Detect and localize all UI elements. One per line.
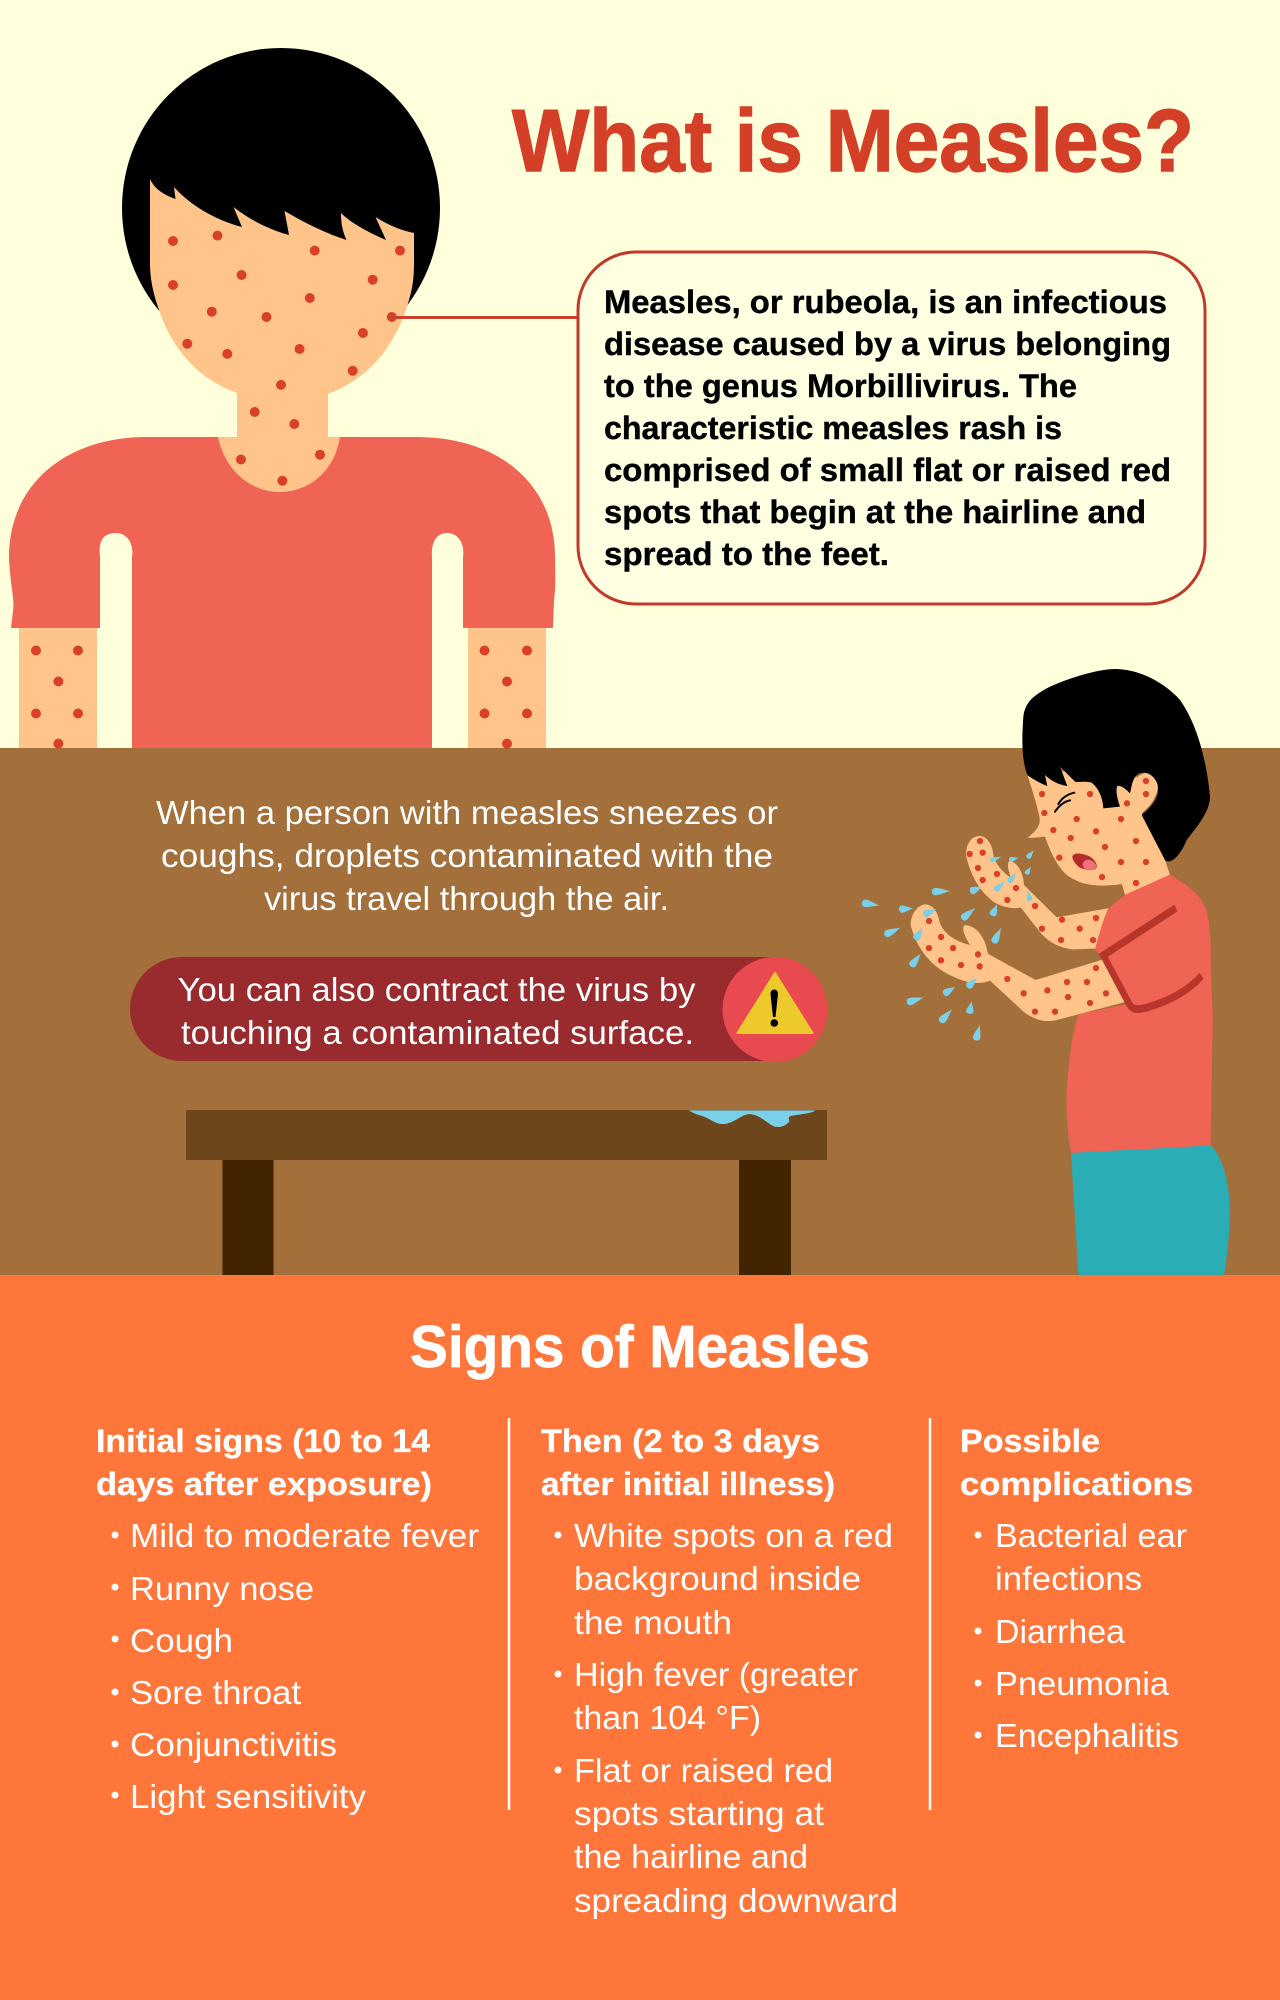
child head details bbox=[1022, 669, 1210, 886]
illustration: man with measles rash bbox=[9, 48, 555, 749]
initial signs heading: Initial signs (10 to 14 bbox=[96, 1423, 430, 1459]
child ear bbox=[1127, 773, 1158, 813]
column: then bbox=[541, 1423, 898, 1919]
callout text bbox=[604, 284, 1171, 572]
then list: spreading downward bbox=[574, 1882, 898, 1919]
child sleeve outline bbox=[1103, 908, 1202, 1009]
then list: High fever (greater bbox=[574, 1656, 858, 1693]
rash spots on child arms bbox=[926, 838, 1109, 1015]
table top bbox=[186, 1110, 827, 1160]
droplet spill bbox=[689, 1110, 815, 1127]
then list bbox=[554, 1517, 898, 1919]
then heading: after initial illness) bbox=[541, 1466, 835, 1502]
initial signs list: Runny nose bbox=[130, 1570, 314, 1607]
then list: the mouth bbox=[574, 1604, 732, 1641]
man hair bbox=[122, 48, 440, 368]
complications heading: complications bbox=[960, 1466, 1193, 1502]
child lower arm and hand bbox=[911, 904, 1127, 1021]
then list: Flat or raised red bbox=[574, 1752, 833, 1789]
child open mouth bbox=[1072, 854, 1097, 870]
child closed eye bbox=[1055, 793, 1074, 812]
man face bbox=[150, 179, 414, 394]
column dividers bbox=[509, 1418, 930, 1810]
then list: spots starting at bbox=[574, 1795, 824, 1832]
illustration: sneezing child bbox=[861, 669, 1230, 1275]
pill text bbox=[178, 971, 696, 1051]
title: What is Measles? bbox=[512, 91, 1194, 190]
complications list: Pneumonia bbox=[995, 1665, 1170, 1702]
column: possible complications bbox=[960, 1423, 1193, 1754]
initial signs list: Cough bbox=[130, 1622, 233, 1659]
then list: than 104 °F) bbox=[574, 1699, 761, 1736]
complications list bbox=[974, 1517, 1187, 1754]
child hair bbox=[1022, 669, 1210, 861]
column: initial signs bbox=[96, 1423, 479, 1815]
initial signs list: Mild to moderate fever bbox=[130, 1517, 479, 1554]
callout text: disease caused by a virus belonging bbox=[604, 326, 1171, 362]
text: how droplets spread: When a person with measles sneezes or bbox=[156, 794, 778, 831]
text: how droplets spread: coughs, droplets contaminated with the bbox=[161, 837, 773, 874]
callout text: to the genus Morbillivirus. The bbox=[604, 368, 1077, 404]
icon: warning sign bbox=[722, 957, 828, 1062]
complications heading: Possible bbox=[960, 1423, 1100, 1459]
initial signs list: Light sensitivity bbox=[130, 1778, 367, 1815]
mouth cavity bbox=[1072, 854, 1097, 870]
initial signs list bbox=[112, 1517, 479, 1815]
pill background bbox=[130, 957, 820, 1061]
pill text: You can also contract the virus by bbox=[178, 971, 696, 1008]
callout box bbox=[578, 252, 1205, 604]
callout text: spots that begin at the hairline and bbox=[604, 494, 1146, 530]
then list: the hairline and bbox=[574, 1838, 808, 1875]
child shirt bbox=[1066, 874, 1213, 1153]
pill text: touching a contaminated surface. bbox=[181, 1014, 694, 1051]
man arms bbox=[19, 620, 546, 748]
heading: Signs of Measles: Signs of Measles bbox=[410, 1314, 870, 1380]
child head skin bbox=[1027, 770, 1170, 901]
text: how droplets spread: virus travel through the air. bbox=[264, 880, 669, 917]
then list: White spots on a red bbox=[574, 1517, 893, 1554]
callout text: spread to the feet. bbox=[604, 536, 889, 572]
panel: brown transmission section bbox=[0, 748, 1280, 1275]
sneeze droplets bbox=[861, 848, 1036, 1041]
man neck and collar bbox=[218, 385, 340, 492]
complications list: Encephalitis bbox=[995, 1717, 1179, 1754]
warning pill bbox=[130, 957, 828, 1062]
then heading bbox=[541, 1423, 835, 1502]
rash spots on man bbox=[31, 231, 532, 749]
initial signs heading bbox=[96, 1423, 432, 1502]
illustration: table with contaminated surface bbox=[186, 1110, 827, 1275]
complications list: Diarrhea bbox=[995, 1613, 1126, 1650]
complications list: infections bbox=[995, 1560, 1142, 1597]
then list: background inside bbox=[574, 1560, 861, 1597]
child arms bbox=[911, 836, 1127, 1021]
panel: cream background bbox=[0, 0, 1280, 748]
callout text: Measles, or rubeola, is an infectious bbox=[604, 284, 1167, 320]
initial signs heading: days after exposure) bbox=[96, 1466, 432, 1502]
initial signs list: Sore throat bbox=[130, 1674, 301, 1711]
callout: measles definition bbox=[578, 252, 1205, 604]
table legs bbox=[222, 1160, 791, 1275]
then heading: Then (2 to 3 days bbox=[541, 1423, 820, 1459]
panel: orange signs section bbox=[0, 1275, 1280, 2000]
child upper arm and hand bbox=[966, 836, 1113, 949]
rash spots on child face bbox=[1039, 778, 1149, 886]
child arm spots and droplets bbox=[861, 838, 1109, 1041]
callout text: comprised of small flat or raised red bbox=[604, 452, 1171, 488]
callout text: characteristic measles rash is bbox=[604, 410, 1062, 446]
complications list: Bacterial ear bbox=[995, 1517, 1187, 1554]
text: how droplets spread bbox=[156, 794, 778, 917]
tongue bbox=[1083, 860, 1096, 870]
complications heading bbox=[960, 1423, 1193, 1502]
child clothes bbox=[1066, 874, 1230, 1275]
callout connector line bbox=[392, 316, 578, 319]
initial signs list: Conjunctivitis bbox=[130, 1726, 337, 1763]
man shirt bbox=[9, 437, 555, 748]
child pants bbox=[1071, 1145, 1230, 1275]
